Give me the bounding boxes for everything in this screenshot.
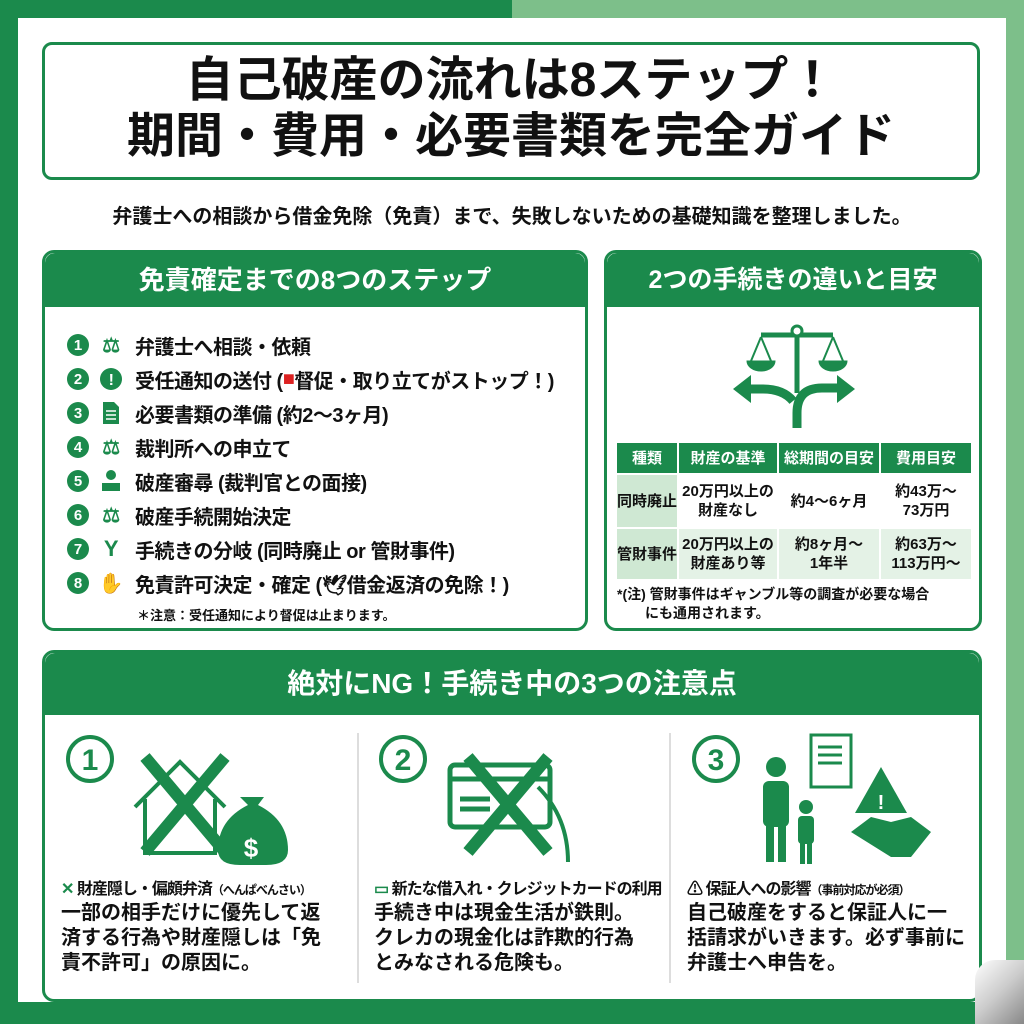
title box: 自己破産の流れは8ステップ！ [186, 54, 836, 107]
step 8: 免責許可決定・確定 (🕊借金返済の免除！) [135, 574, 509, 596]
heading: warnings [45, 653, 979, 715]
text 3: 自己破産をすると保証人に一括請求がいきます。必ず事前に弁護士へ申告を。 [687, 902, 965, 974]
step 1: ⚖ [102, 334, 120, 356]
subtitle: 弁護士への相談から借金免除（免責）まで、失敗しないための基礎知識を整理しました。 [112, 206, 912, 228]
step 1: 1 [74, 336, 82, 354]
panel: warnings [42, 650, 982, 1002]
step 2: 受任通知の送付 ( 督促・取り立てがストップ！) [135, 370, 554, 392]
icon: house and money crossed: $ [244, 833, 259, 863]
table: 管財事件 [617, 546, 677, 562]
table note [617, 586, 929, 621]
page curl [975, 960, 1024, 1024]
table [617, 443, 971, 579]
step 4: ⚖ [102, 436, 120, 458]
step 6: ⚖ [102, 504, 120, 526]
step 5 [67, 470, 367, 494]
icon: guarantor: 3 [708, 744, 724, 777]
step 8: 8 [74, 574, 82, 592]
heading: steps: 免責確定までの8つのステップ [139, 265, 491, 295]
title box: 期間・費用・必要書類を完全ガイド [127, 110, 895, 163]
step 7 [67, 536, 454, 562]
heading: steps [45, 253, 585, 307]
text 1: 一部の相手だけに優先して返済する行為や財産隠しは「免責不許可」の原因に。 [61, 902, 321, 974]
title box [42, 42, 980, 180]
table: 20万円以上の [682, 536, 774, 553]
table: 約8ヶ月〜 [795, 536, 863, 553]
step 7: 7 [74, 540, 82, 558]
table: 総期間の目安 [784, 450, 874, 466]
icon: credit card crossed [379, 735, 570, 862]
column 2 [374, 735, 662, 974]
background light quadrant [512, 0, 1024, 18]
icon: guarantor: ! [878, 792, 884, 814]
panel: steps [42, 250, 588, 631]
icon: house and money crossed: 1 [82, 744, 98, 777]
heading 1: ✕ 財産隠し・偏頗弁済（へんぱべんさい） [61, 881, 311, 898]
step 5: 5 [74, 472, 82, 490]
step 2: ! [109, 372, 113, 389]
table: 113万円〜 [891, 555, 961, 572]
step 1: 弁護士へ相談・依頼 [135, 336, 310, 358]
panel: comparison [604, 250, 982, 631]
icon: guarantor [692, 734, 931, 864]
step 3: 必要書類の準備 (約2〜3ヶ月) [135, 404, 388, 426]
heading: comparison [607, 253, 979, 307]
step 4 [67, 436, 291, 460]
table: 種類 [632, 450, 662, 466]
step 7: Y [104, 536, 118, 561]
column 3 [687, 734, 965, 974]
heading 3: ⚠ 保証人への影響（事前対応が必須） [687, 881, 909, 898]
step 3: 3 [74, 404, 82, 422]
table note: *(注) 管財事件はギャンブル等の調査が必要な場合 [617, 586, 929, 602]
table: 約4〜6ヶ月 [791, 492, 867, 510]
table: 同時廃止 [617, 492, 677, 510]
step 4: 裁判所への申立て [135, 438, 291, 460]
note: ＊注意：受任通知により督促は止まります。 [137, 608, 395, 623]
step 6: 6 [74, 506, 82, 524]
heading: warnings: 絶対にNG！手続き中の3つの注意点 [287, 668, 737, 699]
table: 費用目安 [896, 450, 956, 466]
icon: house and money crossed [66, 735, 288, 865]
step 5: 破産審尋 (裁判官との面接) [135, 472, 367, 494]
heading: comparison: 2つの手続きの違いと目安 [649, 266, 937, 294]
column 1 [61, 735, 321, 974]
table: 20万円以上の [682, 483, 774, 500]
table: 約63万〜 [895, 536, 957, 553]
table note: にも通用されます。 [645, 605, 770, 621]
table: 約43万〜 [895, 483, 957, 500]
step 2: ■ [283, 368, 294, 390]
table: 財産あり等 [690, 555, 766, 572]
table: 財産の基準 [690, 450, 766, 466]
heading 2: ▭ 新たな借入れ・クレジットカードの利用 [374, 881, 662, 898]
step 1 [67, 334, 311, 358]
step 2: 2 [74, 370, 82, 388]
table: 73万円 [903, 502, 949, 519]
step 6 [67, 504, 291, 528]
step 4: 4 [74, 438, 82, 456]
step 6: 破産手続開始決定 [135, 506, 291, 528]
step 7: 手続きの分岐 (同時廃止 or 管財事件) [135, 540, 454, 562]
table: 1年半 [810, 555, 848, 572]
table: 財産なし [698, 502, 758, 519]
step 8: ✋ [99, 572, 123, 594]
icon: credit card crossed: 2 [395, 744, 411, 777]
text 2: 手続き中は現金生活が鉄則。クレカの現金化は詐欺的行為とみなされる危険も。 [374, 902, 634, 974]
icon: scales with fork [733, 324, 855, 428]
